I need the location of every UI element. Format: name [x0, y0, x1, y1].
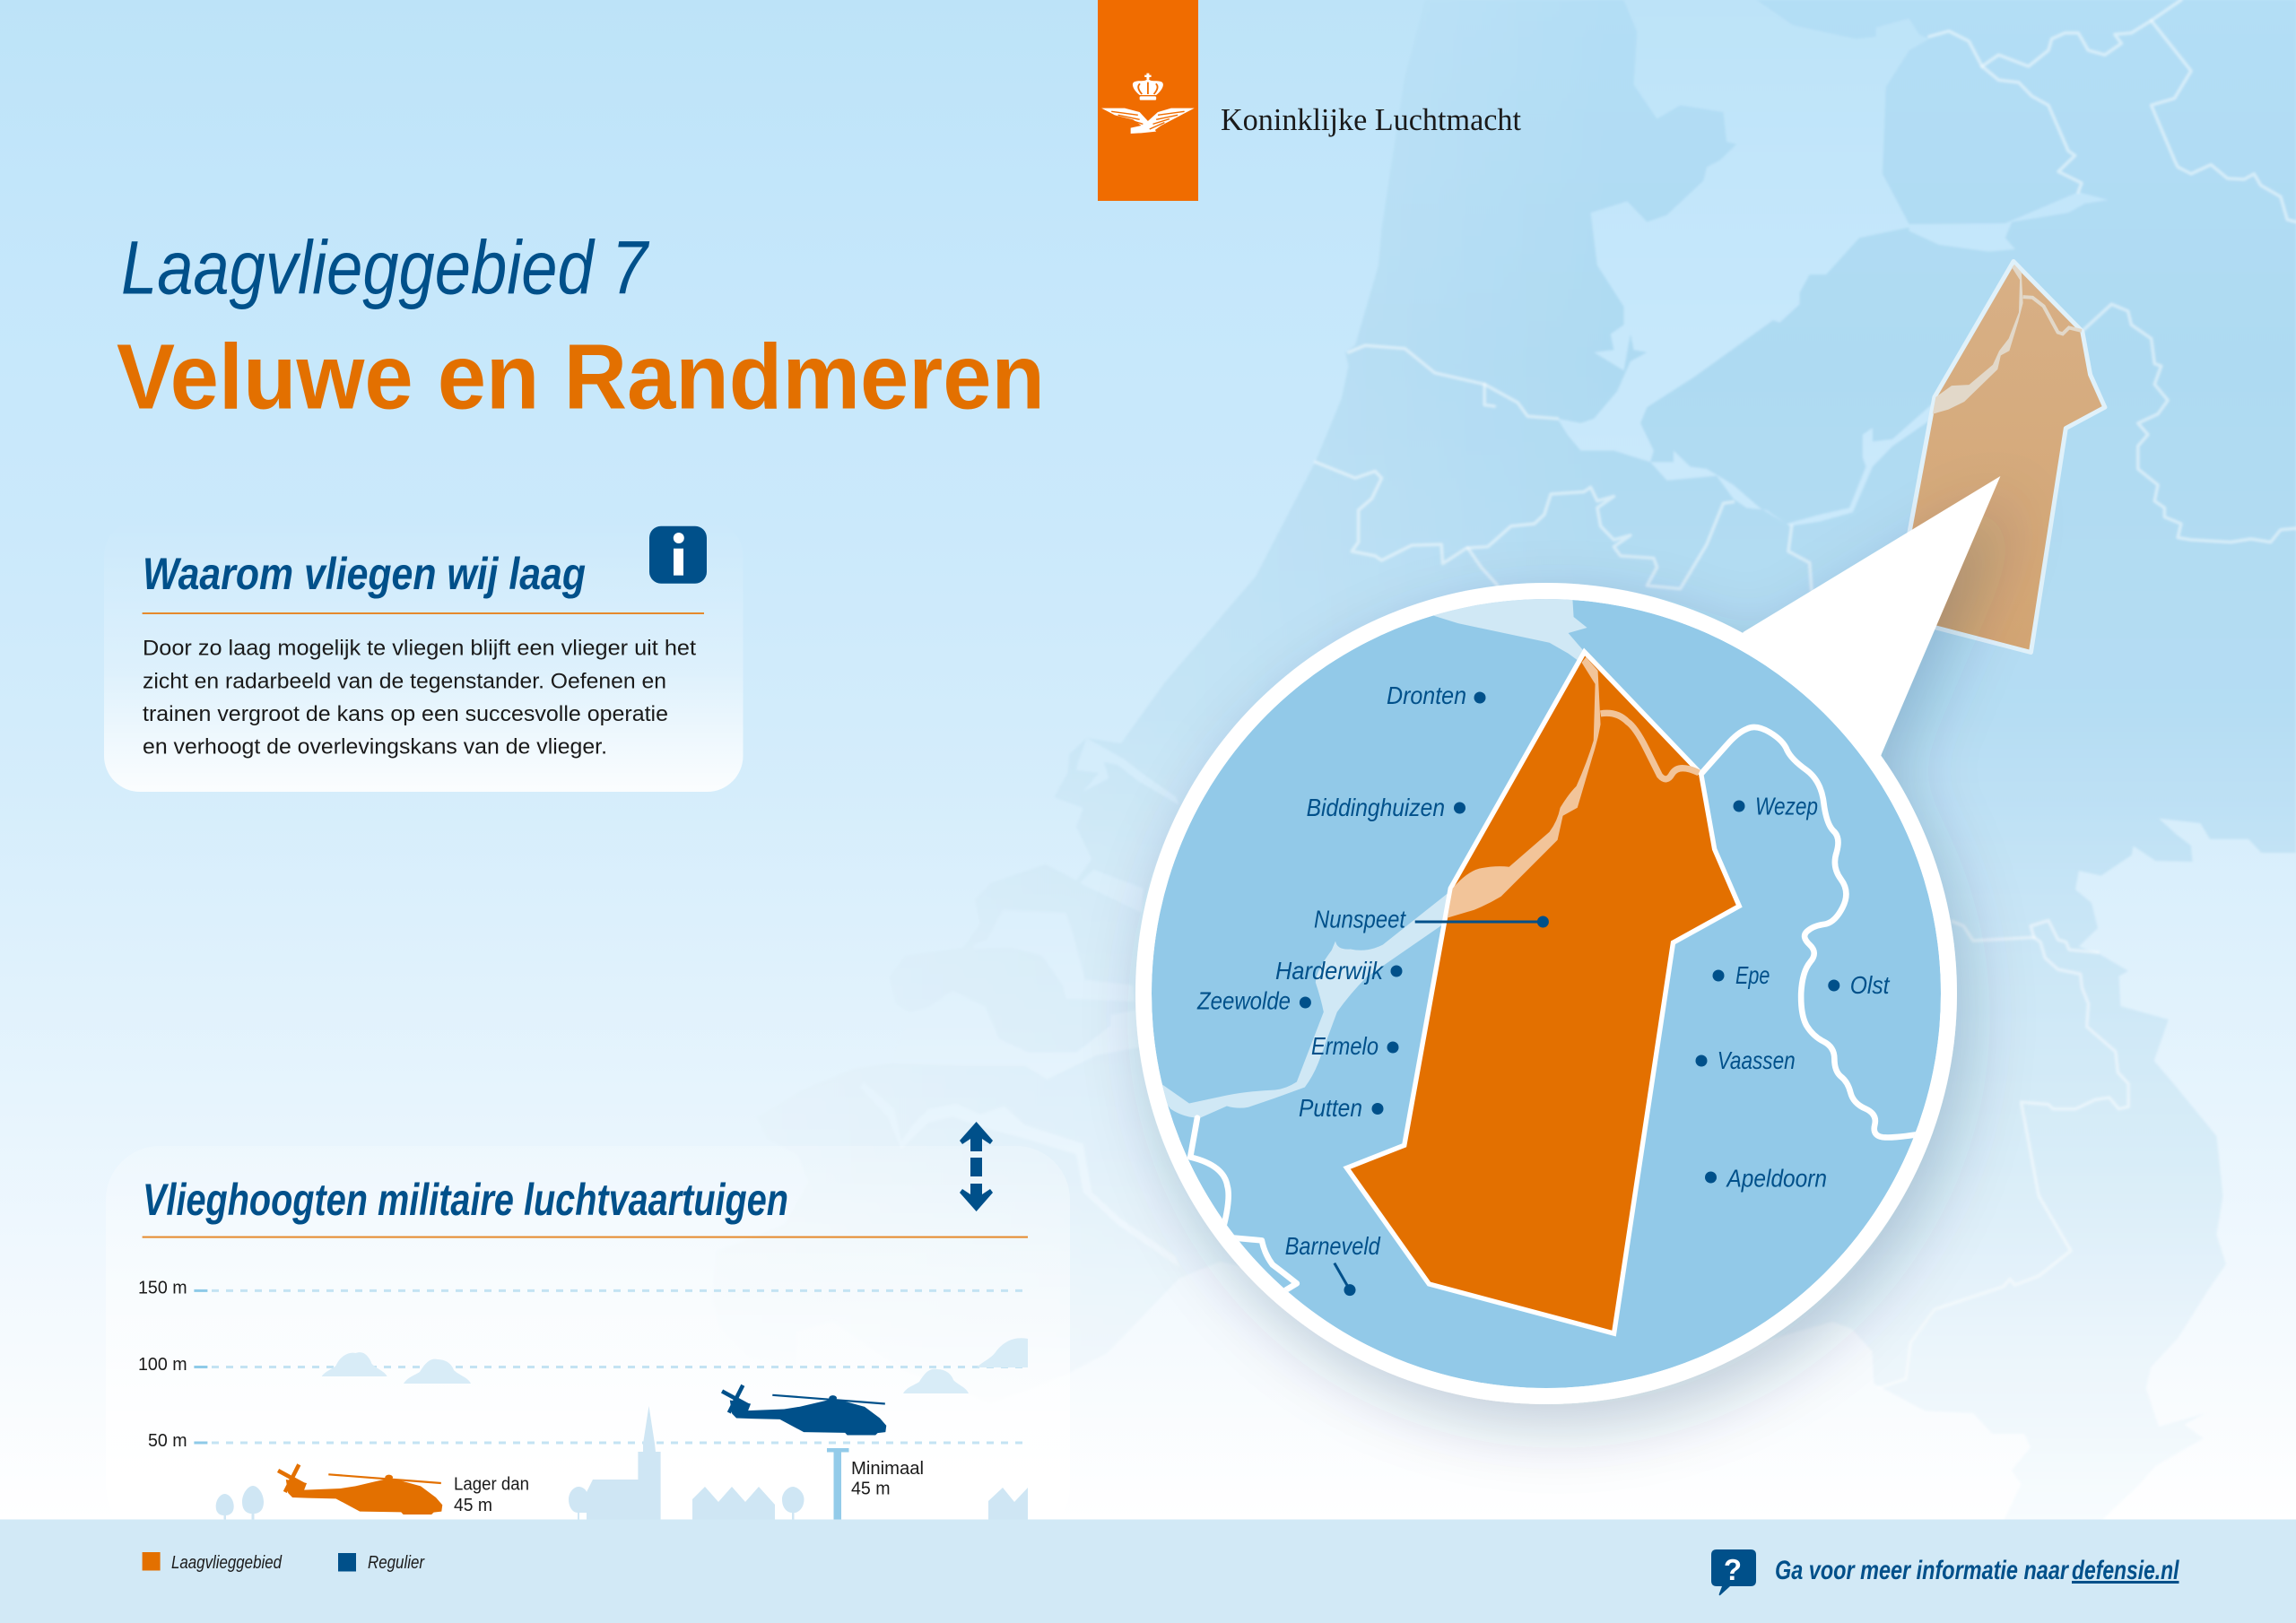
legend: regulier	[338, 1553, 425, 1573]
panel background	[106, 1146, 1070, 1541]
place: Zeewolde: Zeewolde	[1196, 987, 1291, 1015]
low-flying zone arrow	[1347, 652, 1739, 1333]
place: Olst	[1828, 971, 1891, 999]
footer text: Ga voor meer informatie naar	[1775, 1556, 2070, 1585]
map: land mass	[759, 1, 2296, 1505]
heading: Vlieghoogten militaire luchtvaartuigen	[143, 1175, 788, 1225]
clouds	[322, 1338, 1028, 1393]
place: Ermelo: Ermelo	[1311, 1032, 1378, 1060]
place: Epe: Epe	[1735, 961, 1770, 989]
title line 2: Veluwe en Randmeren	[117, 325, 1045, 429]
magnifier: white ring and pointer	[1135, 476, 2000, 1404]
heading: Waarom vliegen wij laag	[143, 549, 586, 599]
place: Barneveld	[1285, 1232, 1381, 1296]
icon: question bubble: ?	[1724, 1553, 1742, 1586]
helicopter low (orange)	[278, 1464, 442, 1515]
map: inland water	[1078, 2, 2105, 1254]
divider rule	[143, 1237, 1028, 1238]
label: minimaal 45 m: Minimaal	[851, 1459, 924, 1479]
body text: trainen vergroot de kans op een succesvolle operatie	[143, 702, 668, 726]
panel: vlieghoogten	[106, 1122, 1070, 1541]
locator arrow fill	[1874, 262, 2105, 653]
place: Barneveld: Barneveld	[1285, 1232, 1381, 1260]
place: Nunspeet: Nunspeet	[1314, 906, 1406, 933]
body text	[143, 637, 696, 759]
place: Biddinghuizen: Biddinghuizen	[1307, 794, 1445, 821]
label: minimaal 45 m: 45 m	[851, 1480, 891, 1499]
detail map: top water	[1433, 599, 1587, 660]
altitude scale	[138, 1279, 1028, 1451]
label: lager dan 45 m: Lager dan	[454, 1475, 529, 1495]
footer: more information	[1711, 1549, 2179, 1595]
place: Harderwijk: Harderwijk	[1275, 957, 1385, 985]
map: province borders south	[1879, 921, 2128, 1388]
background map	[1058, 0, 2296, 1505]
zone arrow: river overlay	[1601, 713, 1699, 779]
map: province borders north	[1316, 0, 2296, 590]
place: Dronten: Dronten	[1387, 681, 1466, 709]
small locator arrow on overview map	[1874, 262, 2105, 653]
village skyline	[216, 1406, 1028, 1520]
body text: Door zo laag mogelijk te vliegen blijft een vlieger uit het	[143, 637, 696, 661]
detail map: province borders	[1190, 727, 1920, 1290]
legend: laagvlieggebied	[143, 1552, 283, 1573]
title line 1: Laagvlieggebied 7	[121, 226, 650, 310]
place labels	[1196, 681, 1891, 1296]
footer band	[0, 1519, 2296, 1623]
detail map base	[1152, 599, 1941, 1388]
legend: regulier: Regulier	[368, 1553, 425, 1573]
icon: question bubble	[1711, 1549, 1756, 1595]
divider rule	[143, 612, 704, 614]
detail map: veluwemeer channel	[1157, 891, 1450, 1118]
icon: double arrow	[960, 1122, 993, 1211]
legend	[143, 1552, 425, 1573]
place: Vaassen: Vaassen	[1718, 1046, 1796, 1074]
label: minimaal 45 m	[851, 1459, 924, 1499]
icon: eagle wings	[1101, 108, 1195, 134]
locator arrow water	[1933, 265, 2023, 414]
legend: laagvlieggebied: Laagvlieggebied	[171, 1553, 283, 1573]
logo: orange bar with crown and eagle	[1098, 0, 1198, 201]
label: lager dan 45 m: 45 m	[454, 1496, 492, 1515]
altitude scale: 50 m	[148, 1431, 187, 1451]
zone arrow: water overlay	[1448, 657, 1601, 918]
place: Wezep: Wezep	[1755, 793, 1818, 820]
altitude scale: 150 m	[138, 1279, 187, 1298]
place: Epe	[1713, 961, 1770, 989]
map: land fade towards the west	[735, 109, 1413, 1248]
title	[117, 226, 1045, 429]
body text: zicht en radarbeeld van de tegenstander. Oefenen en	[143, 669, 666, 693]
panel background	[104, 520, 743, 792]
logo wordmark: Koninklijke Luchtmacht	[1221, 102, 1521, 137]
place: Olst: Olst	[1850, 971, 1891, 999]
place: Nunspeet	[1314, 906, 1549, 933]
icon: info	[649, 526, 707, 584]
footer link: defensie.nl	[2072, 1556, 2179, 1585]
detail map inside magnifier	[1152, 590, 1941, 1388]
place: Putten: Putten	[1299, 1094, 1362, 1122]
body text: en verhoogt de overlevingskans van de vlieger.	[143, 735, 607, 759]
place: Apeldoorn: Apeldoorn	[1726, 1164, 1827, 1193]
locator arrow river	[2023, 297, 2082, 334]
place: Wezep	[1733, 793, 1818, 820]
label: lager dan 45 m	[454, 1475, 529, 1515]
altitude scale: 100 m	[138, 1355, 187, 1375]
place: Vaassen	[1695, 1046, 1796, 1074]
helicopter regular (blue)	[722, 1385, 886, 1435]
icon: crown	[1133, 74, 1163, 100]
height marker pole	[827, 1448, 848, 1520]
panel: waarom vliegen wij laag	[104, 520, 743, 792]
